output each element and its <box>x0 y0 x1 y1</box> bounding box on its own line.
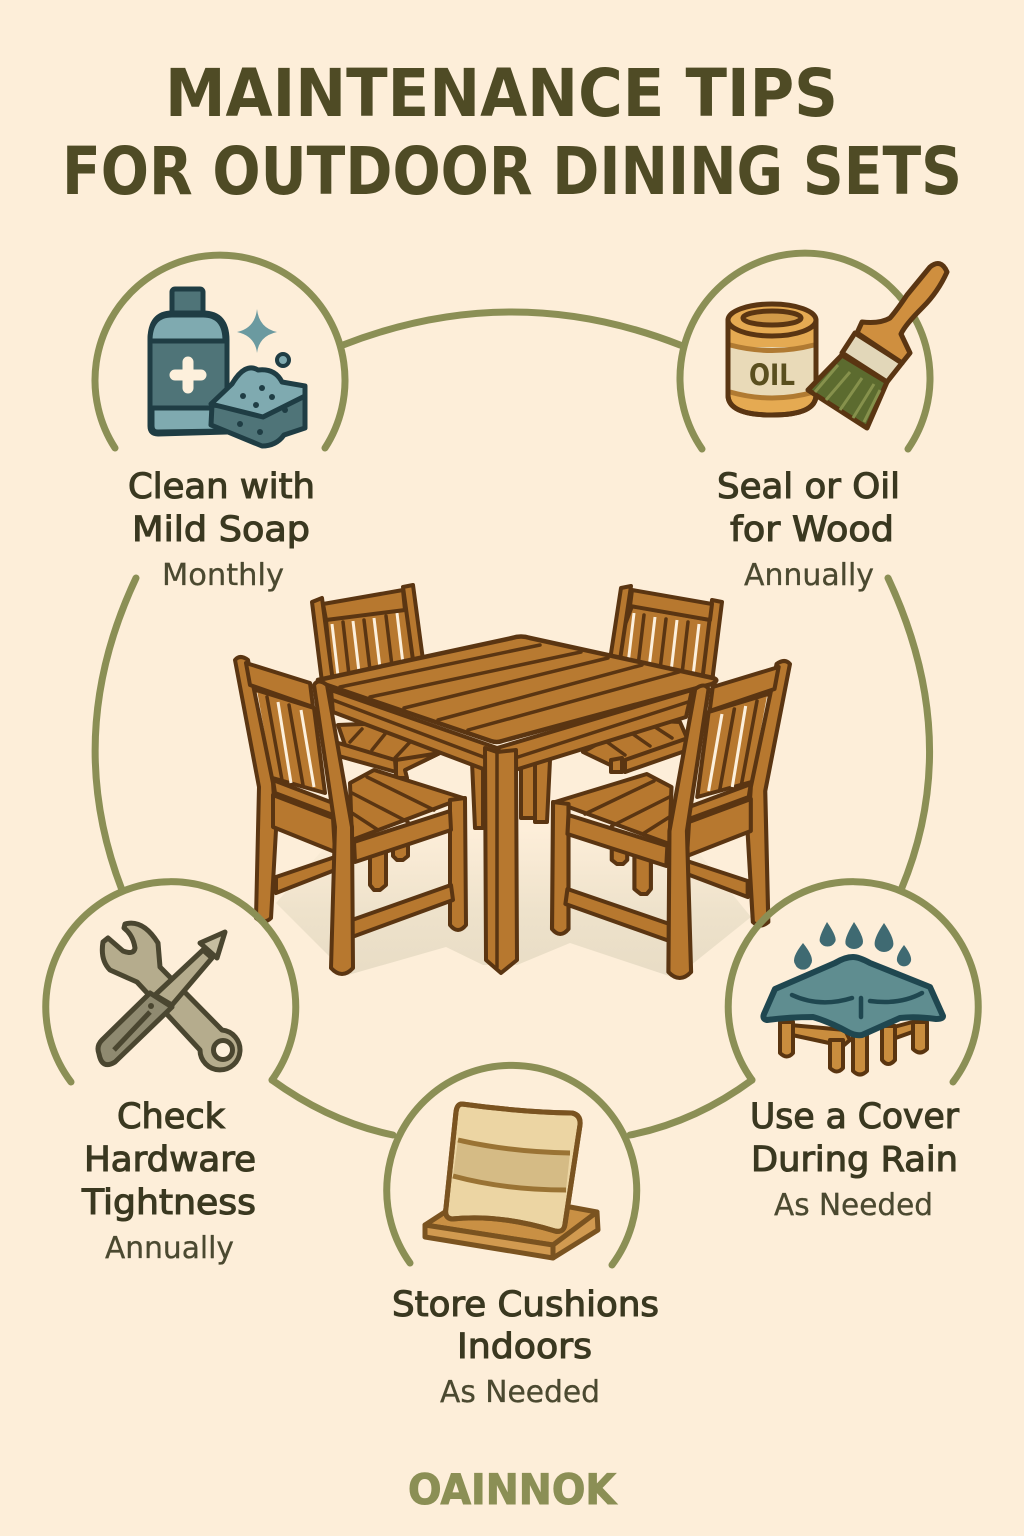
ring <box>46 882 296 1082</box>
label: Annually <box>105 1231 234 1266</box>
back table legs <box>472 760 550 828</box>
icon: soap bottle and sponge <box>150 289 305 446</box>
panel: use a cover during rain <box>728 882 978 1223</box>
footer brand: OAINNOK <box>408 1465 617 1514</box>
icon: table cover <box>763 957 943 1035</box>
ground shadow <box>276 830 751 978</box>
title: MAINTENANCE TIPS <box>165 55 838 132</box>
panel: check hardware tightness <box>46 882 296 1266</box>
label <box>717 467 900 593</box>
table top <box>318 636 716 742</box>
connecting ring arcs <box>95 312 930 1135</box>
label <box>81 1097 256 1266</box>
ring <box>680 253 930 449</box>
label: Hardware <box>84 1140 256 1180</box>
label: Seal or Oil <box>717 467 900 507</box>
icon: oil can: OIL <box>749 358 795 392</box>
icon: table legs under cover <box>780 1020 927 1074</box>
label: Indoors <box>457 1327 592 1367</box>
label <box>392 1285 659 1410</box>
back right chair <box>583 586 722 772</box>
label: Mild Soap <box>132 510 310 550</box>
label: for Wood <box>730 510 894 550</box>
illustration: wooden dining table with four chairs <box>235 585 790 978</box>
label: Tightness <box>81 1183 256 1223</box>
label: Check <box>117 1097 226 1137</box>
ring <box>728 882 978 1082</box>
label: Store Cushions <box>392 1285 659 1325</box>
front right chair <box>552 661 790 978</box>
label <box>750 1097 960 1223</box>
label: As Needed <box>440 1375 600 1410</box>
ring <box>387 1065 637 1265</box>
icon: raindrops <box>794 922 911 970</box>
icon: plus <box>175 362 201 388</box>
table aprons <box>331 690 692 770</box>
icon: wrench <box>102 923 240 1070</box>
label: Monthly <box>162 558 284 593</box>
icon: screwdriver <box>98 932 225 1065</box>
label: As Needed <box>774 1188 933 1223</box>
icon: oil can <box>728 304 816 415</box>
label: Clean with <box>128 467 315 507</box>
title <box>62 55 962 210</box>
panel: seal or oil for wood <box>680 253 947 593</box>
label: During Rain <box>751 1140 958 1180</box>
front left chair <box>235 657 466 974</box>
ring <box>95 255 345 448</box>
icon: cushion on base <box>425 1104 598 1258</box>
panel: store cushions indoors <box>387 1065 659 1410</box>
label: Use a Cover <box>750 1097 960 1137</box>
panel: clean with mild soap <box>95 255 345 593</box>
label <box>128 467 315 593</box>
label: Annually <box>744 558 874 593</box>
icon: paint brush <box>808 263 947 428</box>
table front leg <box>485 748 517 973</box>
back left chair <box>312 585 440 778</box>
